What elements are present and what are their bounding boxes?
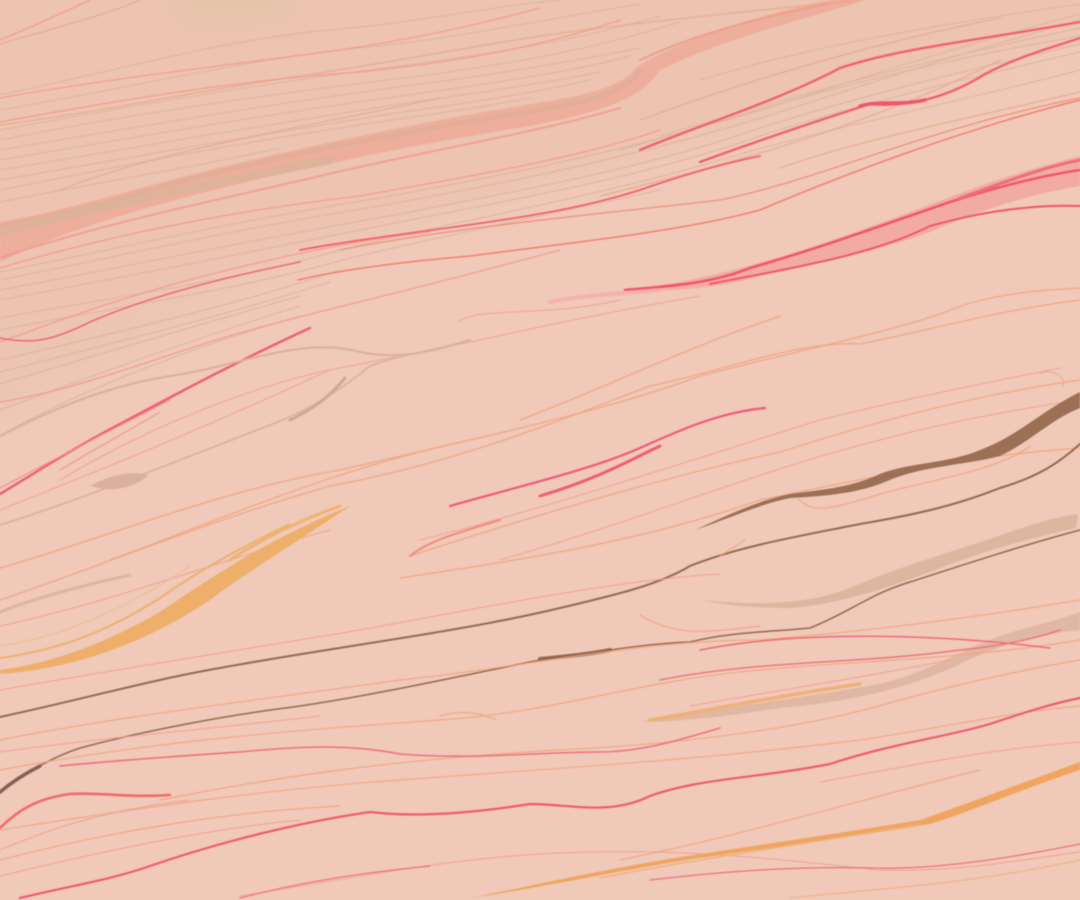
- tan stroke left: [0, 575, 130, 612]
- broad salmon band: [0, 0, 866, 262]
- upper right red streaks: [0, 22, 1080, 341]
- orange diagonal stroke left: [0, 506, 350, 674]
- soft tan shading in upper left: [0, 0, 1080, 450]
- thin brown lines: [0, 444, 1080, 792]
- mid red streak: [410, 408, 765, 556]
- thick brown streak: [695, 392, 1080, 530]
- fine tan striations top: [0, 0, 1080, 436]
- tan broad streaks right: [640, 514, 1080, 722]
- grey taupe swoosh: [0, 340, 470, 525]
- orange and pink fine lines lower half: [0, 446, 1080, 860]
- pink lines upper left: [0, 0, 1080, 402]
- thin mid pink and orange lines: [0, 288, 1080, 600]
- thick red streak right: [550, 156, 1080, 302]
- lower orange stroke: [470, 762, 1080, 898]
- lower red lines: [0, 698, 1080, 898]
- red diagonal left: [0, 328, 310, 494]
